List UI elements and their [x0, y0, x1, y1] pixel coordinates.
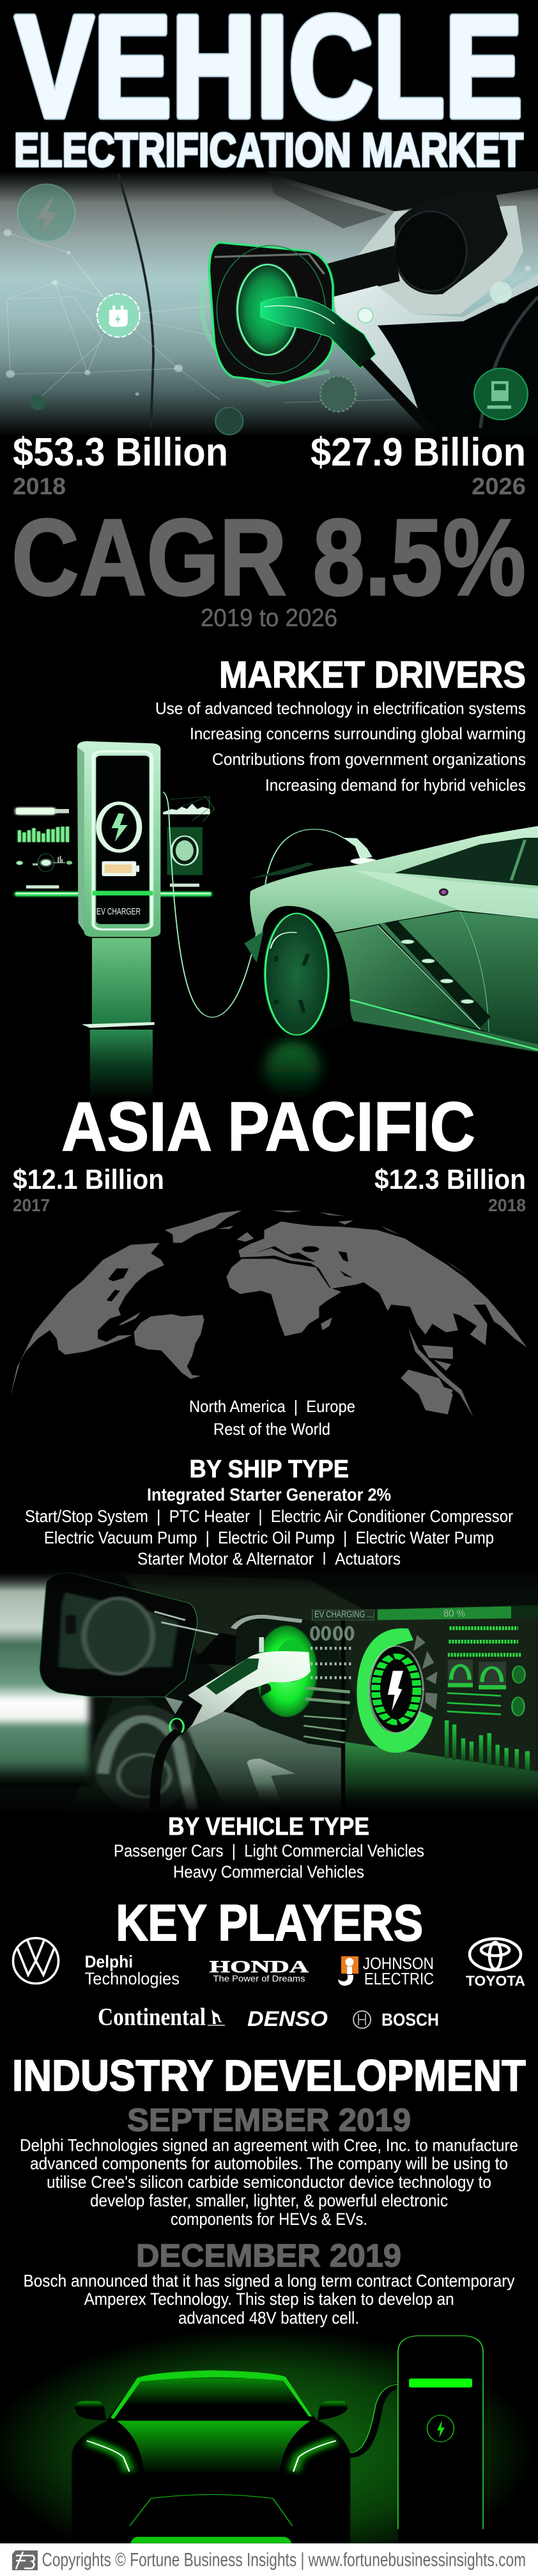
- market driver list: [155, 698, 526, 794]
- logo: Denso: DENSO: [247, 2007, 328, 2030]
- heading: key players: KEY PLAYERS: [116, 1894, 423, 1951]
- heading: September 2019: SEPTEMBER 2019: [127, 2102, 411, 2138]
- market driver list: Increasing demand for hybrid vehicles: [265, 775, 526, 794]
- image: charging plug with holographic dashboard: [0, 1565, 538, 1816]
- market driver list: Use of advanced technology in electrification systems: [155, 698, 526, 718]
- other regions: [189, 1397, 355, 1439]
- stat: 2026 value: 2026: [472, 473, 526, 499]
- text: September development: utilise Cree's silicon carbide semiconductor device technology to: [47, 2172, 491, 2192]
- text: December development: [23, 2272, 515, 2328]
- dashboard label: EV charging: EV CHARGING ...: [314, 1609, 373, 1620]
- text: December development: advanced 48V battery cell.: [178, 2309, 359, 2328]
- stat: Asia Pacific 2018: $12.3 Billion: [374, 1164, 526, 1195]
- text: December development: Amperex Technology. This step is taken to develop an: [84, 2289, 454, 2309]
- other regions: North America | Europe: [189, 1397, 355, 1416]
- dashboard label: EV charging: 80 %: [443, 1608, 465, 1619]
- other regions: Rest of the World: [213, 1420, 330, 1439]
- logo: Delphi Technologies: Technologies: [85, 1969, 180, 1988]
- dashboard label: EV charging: [314, 1608, 465, 1620]
- world map globe: [10, 1211, 526, 1418]
- text: September development: advanced components for automobiles. The company will be using to: [30, 2154, 508, 2173]
- stat: Asia Pacific 2018: [374, 1164, 526, 1215]
- heading: December 2019: DECEMBER 2019: [136, 2238, 401, 2274]
- logo: Honda: HONDA: [210, 1958, 309, 1976]
- logo: Honda: [210, 1958, 309, 1984]
- market driver list: Increasing concerns surrounding global warming: [190, 724, 526, 743]
- logo: Bosch: [353, 2009, 439, 2030]
- text: September development: [20, 2136, 518, 2229]
- text: September development: components for HEVs & EVs.: [171, 2210, 367, 2229]
- vehicle type list: Heavy Commercial Vehicles: [173, 1862, 364, 1881]
- text: September development: develop faster, smaller, lighter, & powerful electronic: [90, 2191, 448, 2210]
- logo: Toyota: TOYOTA: [466, 1973, 525, 1989]
- stat: 2026 value: [311, 430, 526, 499]
- illustration: EV charger station: [15, 741, 538, 1100]
- logo: Delphi Technologies: Delphi: [85, 1952, 133, 1971]
- illustration: EV charger station: EV CHARGER: [96, 907, 141, 917]
- stat: Asia Pacific 2017: [13, 1164, 164, 1215]
- logo: Johnson Electric: ELECTRIC: [364, 1970, 434, 1988]
- logo: Delphi Technologies: [85, 1952, 180, 1988]
- CAGR period: 2019 to 2026: [201, 604, 337, 632]
- stat: Asia Pacific 2017: 2017: [13, 1195, 50, 1215]
- heading: by vehicle type: BY VEHICLE TYPE: [168, 1813, 369, 1841]
- heading: by ship type: BY SHIP TYPE: [189, 1456, 349, 1483]
- market driver list: Contributions from government organizations: [212, 750, 526, 769]
- logo: Toyota: [466, 1939, 525, 1989]
- stat: 2026 value: $27.9 Billion: [311, 430, 526, 475]
- illustration: car and charging station: [0, 2328, 535, 2574]
- stat: 2018 value: 2018: [13, 473, 66, 499]
- logo: Bosch: BOSCH: [381, 2009, 439, 2030]
- logo: Continental: Continental: [98, 2003, 206, 2031]
- logo: Honda: The Power of Dreams: [213, 1974, 305, 1984]
- ship type list: [25, 1507, 513, 1568]
- ship type list: Electric Vacuum Pump | Electric Oil Pump | Electric Water Pump: [44, 1528, 494, 1548]
- stat: Asia Pacific 2018: 2018: [488, 1195, 526, 1215]
- stat: Asia Pacific 2017: $12.1 Billion: [13, 1164, 164, 1195]
- stat: 2018 value: [13, 430, 228, 499]
- footer: [0, 2543, 538, 2576]
- vehicle type list: [114, 1841, 424, 1881]
- logo: Johnson Electric: JOHNSON: [363, 1955, 434, 1973]
- subheading: integrated starter generator: Integrated Starter Generator 2%: [147, 1485, 391, 1504]
- logo: Volkswagen: [13, 1938, 59, 1984]
- logo: Johnson Electric: [338, 1955, 434, 1988]
- heading: Asia Pacific: ASIA PACIFIC: [61, 1088, 475, 1166]
- stat: 2018 value: $53.3 Billion: [13, 430, 228, 475]
- vehicle type list: Passenger Cars | Light Commercial Vehicles: [114, 1841, 424, 1860]
- ship type list: Starter Motor & Alternator | Actuators: [137, 1549, 401, 1568]
- hero image: charging socket: [0, 171, 538, 437]
- footer logo: [12, 2550, 38, 2570]
